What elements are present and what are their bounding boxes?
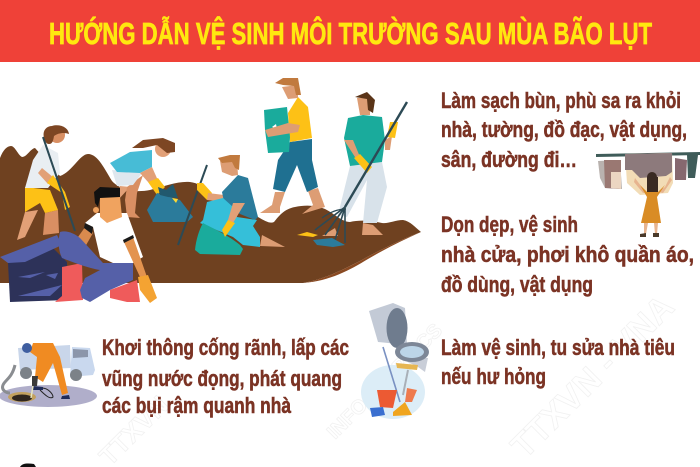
watermarks: INFOGRAPHICS xyxy=(323,320,447,444)
header banner xyxy=(0,0,700,62)
text: clean mud: sân, đường đi… xyxy=(441,147,577,172)
text: clean mud xyxy=(441,88,687,172)
text: drains: vũng nước đọng, phát quang xyxy=(102,366,342,391)
person: carrying sack xyxy=(260,78,325,214)
text: tidy and dry: đồ dùng, vật dụng xyxy=(441,272,593,297)
person: bending with blue shirt xyxy=(110,138,175,218)
text: drains: Khơi thông cống rãnh, lấp các xyxy=(102,335,349,360)
muddy ground xyxy=(0,146,421,283)
illustration: woman hanging laundry xyxy=(596,152,700,237)
watermarks xyxy=(93,288,682,467)
text: tidy and dry xyxy=(441,212,694,297)
cropped black shape at bottom xyxy=(20,463,36,467)
text: drains: các bụi rậm quanh nhà xyxy=(102,393,292,418)
text: latrine xyxy=(441,335,675,389)
text: latrine: nếu hư hỏng xyxy=(441,364,546,389)
watermarks: TTXVN - VNA xyxy=(504,288,682,466)
person: left standing with stick xyxy=(17,125,75,240)
blue trash bag xyxy=(147,184,193,222)
illustration: sewer worker and truck xyxy=(0,343,97,407)
illustration: people cleaning mud xyxy=(0,78,421,303)
text: tidy and dry: Dọn dẹp, vệ sinh xyxy=(441,212,578,237)
person: crouching with litter picker xyxy=(178,155,285,255)
person: raking xyxy=(297,92,407,247)
illustration: toilet and cleaning tools xyxy=(361,303,429,419)
person: seated in front with trash bag xyxy=(0,187,157,303)
text: drains xyxy=(102,335,349,418)
